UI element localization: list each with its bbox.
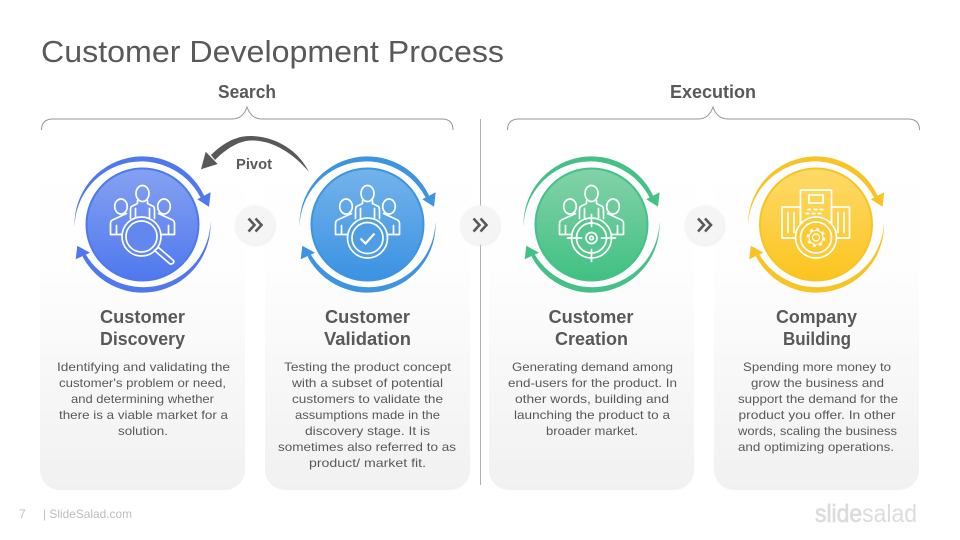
heading: customer validation: Customer — [325, 307, 410, 327]
text: customer discovery description: solution. — [118, 424, 168, 438]
text: customer discovery description — [57, 360, 230, 438]
text: customer creation description: launching the product to a — [514, 408, 670, 422]
text: customer validation description: assumptions made in the — [295, 408, 440, 422]
panel: customer discovery card — [40, 135, 245, 490]
icon: customer validation — [299, 156, 436, 293]
heading: customer discovery: Discovery — [100, 329, 185, 349]
text: company building description: product you offer. In other — [738, 408, 896, 422]
heading: customer validation — [324, 307, 411, 349]
chevron button 3 — [685, 206, 725, 246]
text: customer discovery description: and determining whether — [71, 392, 214, 406]
footer: source: | SlideSalad.com — [43, 507, 132, 521]
text: company building description: support the demand for the — [738, 392, 898, 406]
heading: customer discovery: Customer — [100, 307, 185, 327]
text: customer creation description: Generating demand among — [512, 360, 673, 374]
text: company building description: grow the business and — [751, 376, 884, 390]
bracket: execution — [508, 107, 920, 130]
icon: customer discovery — [74, 156, 211, 293]
icon: customer creation — [523, 156, 660, 293]
logo: slidesalad: slidesalad — [815, 500, 917, 528]
chevron button 2 — [460, 206, 500, 246]
heading: customer discovery — [100, 307, 185, 349]
title: Customer Development Process — [41, 34, 504, 69]
text: customer discovery description: there is a viable market for a — [59, 408, 228, 422]
heading: company building: Company — [776, 307, 857, 327]
text: customer validation description: sometimes also referred to as — [278, 440, 456, 454]
text: customer discovery description: Identifying and validating the — [57, 360, 230, 374]
text: customer validation description: with a subset of potential — [291, 376, 443, 390]
text: customer creation description — [508, 360, 677, 438]
heading: customer creation — [548, 307, 634, 349]
panel: company building card — [714, 135, 919, 490]
heading: execution: Execution — [670, 82, 756, 102]
text: customer validation description: Testing the product concept — [284, 360, 452, 374]
heading: company building: Building — [783, 329, 851, 349]
text: company building description: words, scaling the business — [737, 424, 897, 438]
text: company building description: and optimizing operations. — [738, 440, 894, 454]
text: customer validation description — [278, 360, 456, 470]
text: customer creation description: broader market. — [546, 424, 638, 438]
text: company building description: Spending more money to — [743, 360, 891, 374]
phase divider — [480, 119, 482, 485]
arrow: pivot — [201, 136, 309, 172]
icon: company building — [748, 156, 884, 293]
footer: page number: 7 — [19, 507, 26, 521]
heading: customer creation: Customer — [548, 307, 634, 327]
text: customer validation description: customers to validate the — [292, 392, 443, 406]
text: customer creation description: other words, building and — [515, 392, 669, 406]
panel: customer validation card — [265, 135, 470, 490]
heading: company building — [776, 307, 857, 349]
bracket: search — [42, 107, 453, 130]
heading: customer creation: Creation — [555, 329, 628, 349]
text: company building description — [737, 360, 898, 454]
heading: customer validation: Validation — [324, 329, 411, 349]
text: customer discovery description: customer's problem or need, — [59, 376, 226, 390]
text: customer validation description: product/ market fit. — [309, 456, 426, 470]
text: customer creation description: end-users for the product. In — [508, 376, 677, 390]
chevron button 1 — [236, 206, 276, 246]
text: customer validation description: discovery stage. It is — [305, 424, 430, 438]
label: pivot: Pivot — [236, 156, 272, 173]
heading: search: Search — [218, 82, 276, 102]
panel: customer creation card — [489, 135, 694, 490]
